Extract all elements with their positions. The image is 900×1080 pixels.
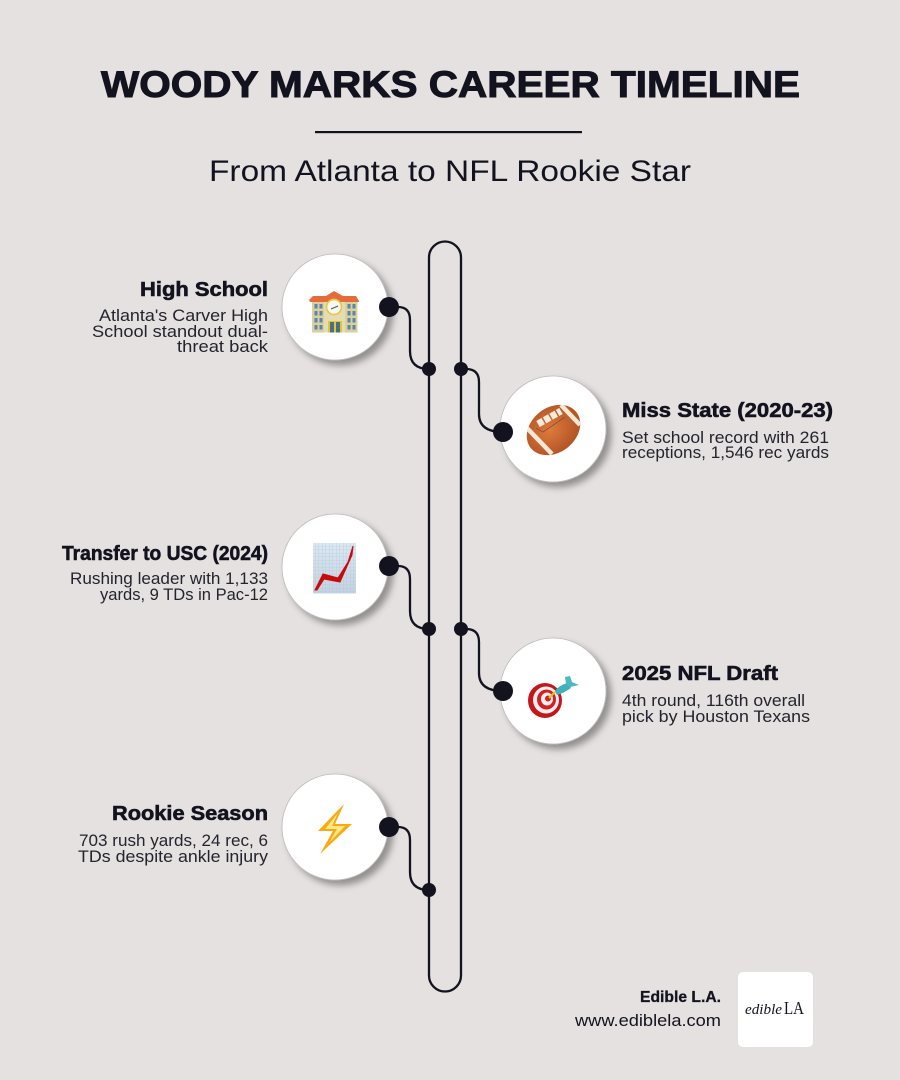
icon: dart target [528, 676, 579, 718]
description: high school [92, 307, 269, 356]
infographic canvas [62, 70, 832, 1047]
icon circle: rookie season [282, 774, 388, 880]
description: NFL draft [622, 692, 810, 726]
icon circle: miss state [500, 376, 606, 482]
node dot: NFL draft [493, 681, 513, 701]
description: transfer to USC: yards, 9 TDs in Pac-12 [100, 586, 268, 604]
icon circle: NFL draft [500, 638, 606, 744]
publisher name: Edible L.A. [640, 989, 721, 1006]
icon: school building [309, 291, 359, 332]
heading: transfer to USC: Transfer to USC (2024) [62, 542, 268, 565]
logo: edible LA [738, 972, 813, 1047]
panel: transfer to USC [62, 514, 399, 620]
panel: rookie season [78, 774, 399, 880]
heading: high school: High School [140, 278, 268, 301]
logo: edible LA: LA [784, 998, 804, 1018]
timeline track [429, 242, 461, 992]
description: rookie season: TDs despite ankle injury [78, 848, 269, 866]
connector: miss state [461, 369, 503, 432]
node dot: high school [379, 297, 399, 317]
subtitle: From Atlanta to NFL Rookie Star [209, 155, 691, 188]
description: transfer to USC: Rushing leader with 1,133 [70, 570, 268, 588]
description: miss state: Set school record with 261 [622, 429, 829, 447]
description: miss state [622, 429, 829, 462]
heading: NFL draft: 2025 NFL Draft [622, 662, 778, 685]
icon circle: high school [282, 254, 388, 360]
description: high school: School standout dual- [92, 323, 268, 341]
panel: NFL draft [493, 638, 810, 744]
track junction dots [422, 362, 468, 897]
panel: miss state [493, 376, 833, 482]
description: NFL draft: pick by Houston Texans [622, 708, 810, 726]
description: rookie season: 703 rush yards, 24 rec, 6 [79, 832, 268, 850]
publisher url: www.ediblela.com [574, 1012, 721, 1030]
node dot: miss state [493, 422, 513, 442]
description: miss state: receptions, 1,546 rec yards [622, 444, 829, 462]
node dot: rookie season [379, 817, 399, 837]
connector: high school [389, 307, 429, 369]
connector: transfer to USC [389, 566, 429, 629]
heading: rookie season: Rookie Season [112, 802, 268, 825]
heading: miss state: Miss State (2020-23) [622, 399, 833, 422]
icon: football [526, 404, 580, 456]
icon: lightning bolt [318, 804, 352, 854]
connector: rookie season [389, 827, 429, 890]
connector: NFL draft [461, 629, 503, 691]
footer: publisher credit [574, 972, 813, 1047]
description: transfer to USC [70, 570, 268, 604]
description: NFL draft: 4th round, 116th overall [622, 692, 805, 710]
panel: high school [92, 254, 399, 360]
icon: rising chart [313, 543, 356, 594]
logo: edible LA: edible [745, 1002, 782, 1018]
description: high school: threat back [177, 338, 269, 356]
description: high school: Atlanta's Carver High [99, 307, 268, 325]
node dot: transfer to USC [379, 556, 399, 576]
description: rookie season [78, 832, 269, 866]
icon circle: transfer to USC [282, 514, 388, 620]
title: WOODY MARKS CAREER TIMELINE [101, 64, 800, 105]
